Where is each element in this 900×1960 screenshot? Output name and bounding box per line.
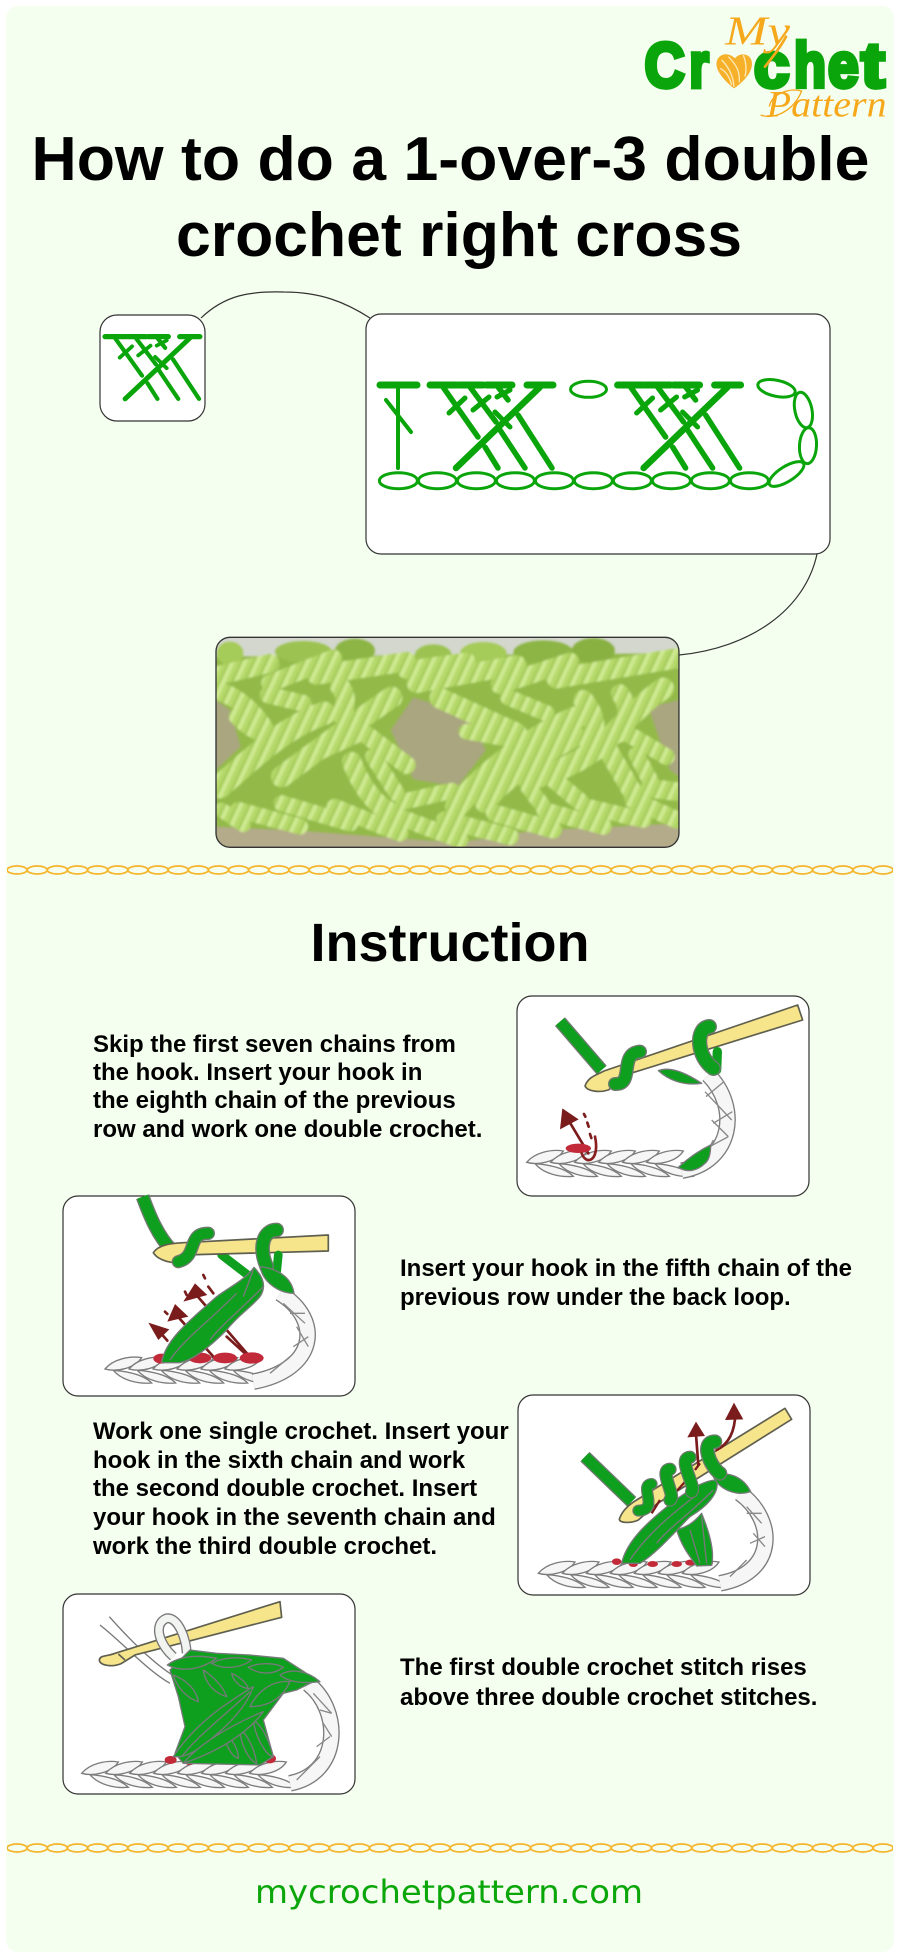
text: step 1 — [93, 1031, 482, 1143]
red arrow — [568, 1120, 588, 1153]
heading: Instruction: Instruction — [310, 913, 590, 973]
chain — [105, 1357, 272, 1383]
divider: chain — [7, 1842, 893, 1854]
yarn strands — [220, 658, 677, 840]
logo word: Pattern: Pattern — [766, 84, 887, 125]
stitch body — [170, 1650, 317, 1765]
text: step 3: hook in the sixth chain and work — [93, 1447, 466, 1474]
panel: step 2 illustration — [63, 1196, 355, 1396]
trailing thread — [100, 1617, 175, 1683]
chain — [527, 1150, 693, 1177]
white loop — [159, 1618, 187, 1657]
text: step 3: the second double crochet. Insert — [93, 1475, 477, 1502]
logo word: Crochet — [645, 31, 885, 101]
title: crochet right cross — [176, 201, 742, 270]
logo icon: yarn heart — [716, 54, 752, 88]
logo word: My — [724, 8, 791, 67]
text: step 3: work the third double crochet. — [92, 1533, 437, 1560]
divider: chain — [7, 864, 893, 876]
logo: My Crochet Pattern — [645, 8, 887, 125]
yarn mass with centre gap — [216, 653, 679, 843]
red arrows — [157, 1293, 248, 1357]
thread wraps — [615, 1052, 640, 1084]
hook — [99, 1602, 282, 1666]
text: step 2: previous row under the back loop. — [400, 1284, 791, 1311]
text: step 3: your hook in the seventh chain and — [93, 1504, 496, 1531]
footer: website: mycrochetpattern.com — [255, 1873, 643, 1911]
panel: stitch chart — [366, 314, 830, 554]
text: step 2: Insert your hook in the fifth chain of the — [400, 1255, 852, 1282]
stitch leaves — [260, 1267, 294, 1293]
title — [32, 125, 870, 270]
hook — [619, 1408, 792, 1522]
thread tail — [143, 1197, 172, 1250]
panel: step 4 illustration — [63, 1594, 355, 1794]
text: step 2 — [400, 1255, 852, 1311]
thread wraps — [638, 1484, 652, 1511]
crossing stitch — [173, 1687, 253, 1757]
stitch top loops — [167, 1656, 217, 1669]
logo word: Crochet: c — [754, 31, 789, 101]
text: step 1: the hook. Insert your hook in — [93, 1059, 422, 1086]
hook — [153, 1235, 328, 1263]
text: step 1: row and work one double crochet. — [93, 1116, 482, 1143]
text: step 3 — [92, 1418, 509, 1560]
logo word: Crochet: h — [794, 31, 826, 101]
thread tail — [560, 1022, 602, 1070]
logo word: Crochet: C — [645, 31, 685, 101]
chain — [538, 1561, 705, 1588]
title: How to do a 1-over-3 double — [32, 125, 870, 194]
text: step 4: The first double crochet stitch rises — [400, 1654, 807, 1681]
red base — [612, 1558, 621, 1565]
text: step 1: Skip the first seven chains from — [93, 1031, 456, 1058]
thread tail — [585, 1457, 632, 1502]
red base — [165, 1756, 177, 1764]
panel: small stitch symbol — [100, 315, 205, 421]
photo: crocheted sample — [216, 637, 679, 847]
red arrows — [696, 1430, 698, 1465]
panel: step 1 illustration — [517, 996, 809, 1196]
logo word: Crochet: t — [861, 31, 885, 101]
hook — [585, 1005, 803, 1091]
text: step 4 — [400, 1654, 817, 1711]
panel: step 3 illustration — [518, 1395, 810, 1595]
chain — [82, 1761, 248, 1788]
stitch leaves — [677, 1513, 713, 1566]
thread wraps — [178, 1233, 208, 1262]
logo word: My: My — [724, 8, 791, 54]
chart symbols — [379, 377, 817, 491]
text: step 4: above three double crochet stitches. — [400, 1684, 817, 1711]
logo word: Crochet: e — [828, 31, 859, 101]
connector: small symbol to enlarged chart — [201, 292, 370, 318]
logo word: Crochet: r — [689, 31, 709, 101]
connector: chart to photo — [679, 554, 817, 655]
text: step 1: the eighth chain of the previous — [93, 1087, 456, 1114]
text: step 3: Work one single crochet. Insert your — [93, 1418, 509, 1445]
